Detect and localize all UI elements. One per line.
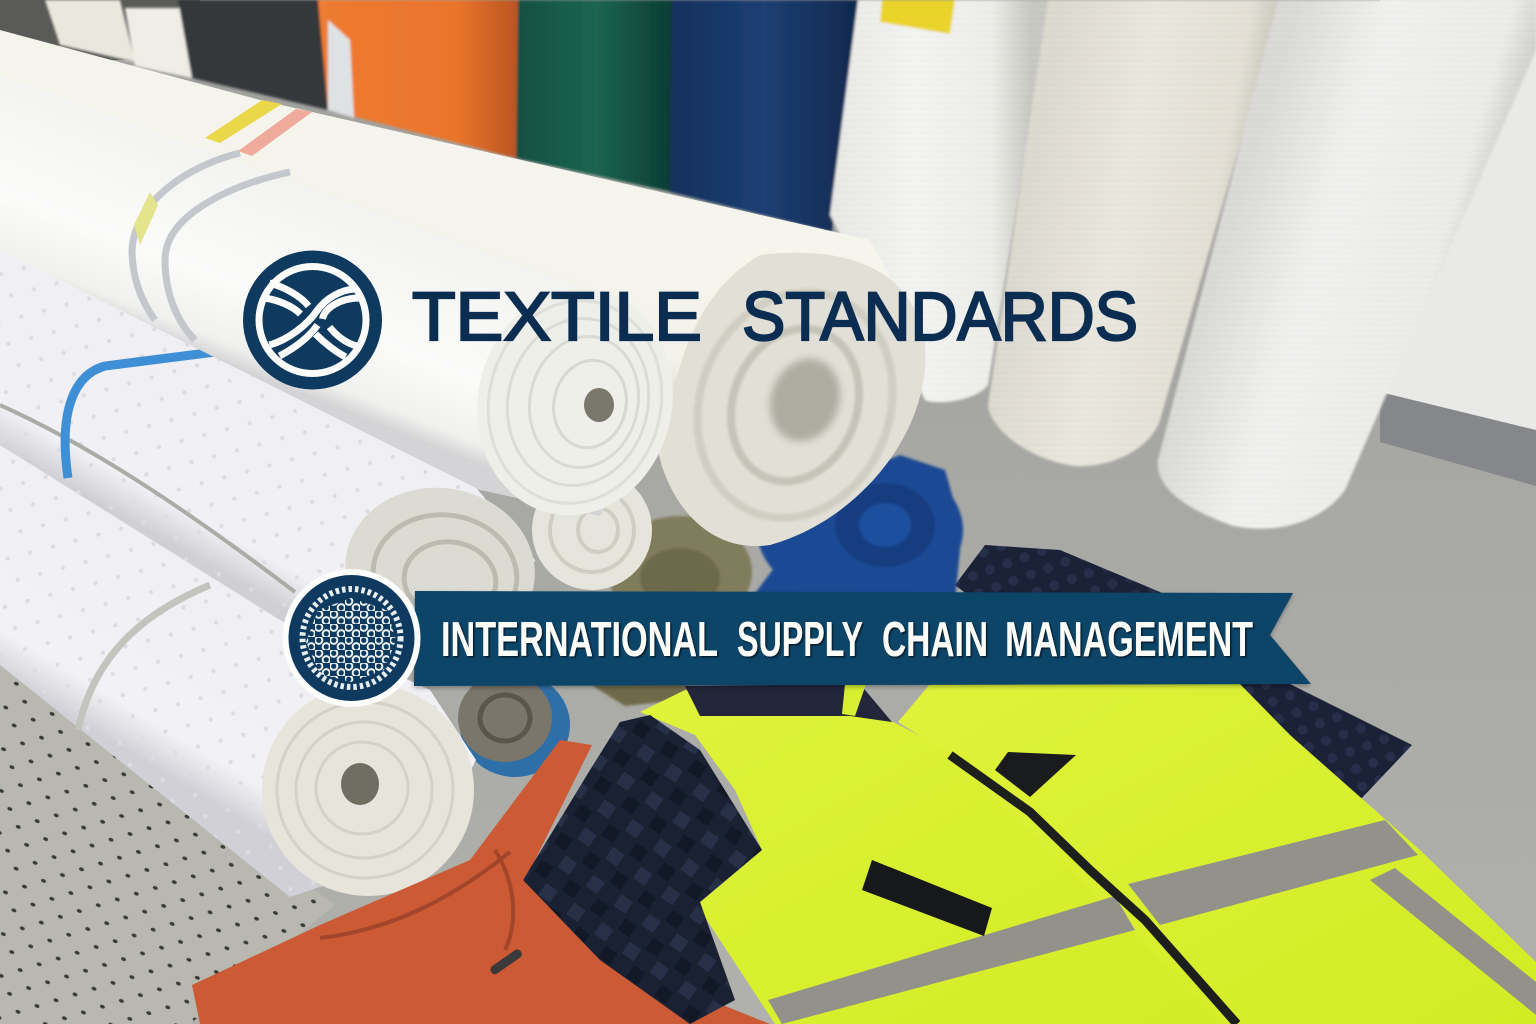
roll C end xyxy=(335,476,545,664)
vest label 1 xyxy=(862,860,992,936)
banner text: CHAIN xyxy=(882,613,988,667)
roll D end xyxy=(238,660,498,920)
logo mark xyxy=(243,250,382,390)
back row of upright fabric rolls xyxy=(45,0,1536,529)
orange garment xyxy=(192,740,770,1024)
perforated floor mat xyxy=(0,660,335,1024)
olive fabric roll xyxy=(590,516,752,706)
title: STANDARDS xyxy=(742,278,1138,355)
hi-vis vest right panel xyxy=(898,684,1536,1024)
garments on the floor xyxy=(192,545,1536,1024)
banner ribbon xyxy=(414,591,1311,686)
small roll under banner xyxy=(458,673,570,777)
blue strap xyxy=(65,352,215,478)
banner text: SUPPLY xyxy=(737,613,863,667)
small white roll end xyxy=(515,453,669,607)
title: TEXTILE xyxy=(412,278,702,355)
dark patterned fabric xyxy=(523,715,762,1024)
banner text: INTERNATIONAL xyxy=(441,613,718,667)
small rolls under the stack xyxy=(458,455,963,777)
hi-vis vest left panel xyxy=(640,690,1260,1024)
white roll B: main lying roll xyxy=(0,75,694,534)
strapping bands xyxy=(132,153,290,340)
white roll A: rear lying roll xyxy=(0,30,925,546)
white roll C: middle dotted roll xyxy=(0,240,669,664)
banner text: MANAGEMENT xyxy=(1005,613,1253,667)
vest zipper xyxy=(950,755,1237,1024)
reflective stripes xyxy=(768,896,1135,1024)
dark collar under banner xyxy=(685,684,892,722)
roll A end xyxy=(658,253,925,546)
vest label 2 xyxy=(995,752,1076,797)
emblem badge xyxy=(282,569,420,707)
white roll D: front dotted roll xyxy=(0,445,498,920)
blue fabric roll xyxy=(750,455,963,604)
title xyxy=(412,278,1138,355)
dark fabric, upper right xyxy=(955,545,1412,800)
roll B end xyxy=(456,270,694,534)
banner text xyxy=(441,613,1253,667)
